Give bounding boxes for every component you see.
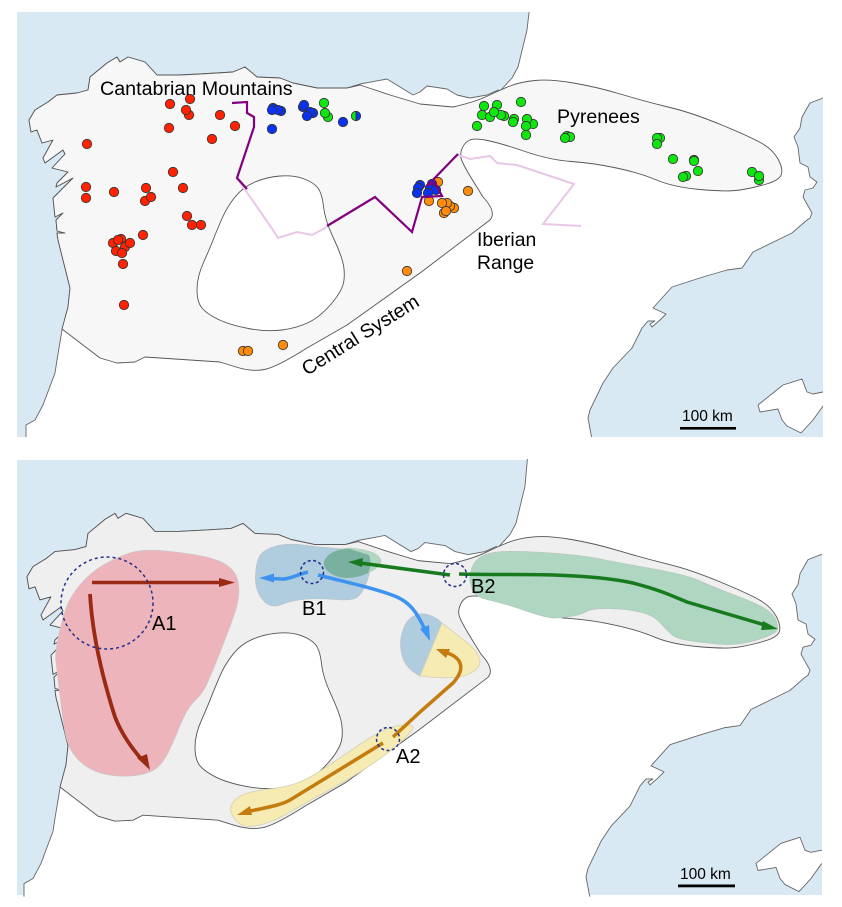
arrow: B1 south-east (318, 575, 430, 641)
label: A2: A2 (396, 746, 420, 768)
arrow: B1 westward (259, 572, 308, 582)
label: Pyrenees: Pyrenees (557, 106, 640, 128)
boundary line: purple parts (232, 102, 458, 232)
label: B2: B2 (471, 576, 495, 598)
arrow: B2 eastward (459, 574, 778, 630)
site marker: mixed green and blue (351, 111, 361, 121)
mountain range area (27, 513, 780, 829)
dashed circle: A1 (61, 557, 153, 649)
panel: top map of sampling sites (17, 4, 830, 445)
region: B2 green overlap (324, 548, 381, 578)
region: B2 green Pyrenees (470, 551, 778, 645)
boundary line: faded parts (237, 155, 581, 238)
site markers: red (81, 94, 240, 310)
dashed circle: A2 (376, 728, 400, 750)
region: A2 yellow Central System (230, 725, 413, 826)
label: Iberian Range: Iberian (477, 229, 536, 251)
label: Central System: Central System (298, 291, 423, 380)
arrow: A1 southward (90, 594, 150, 770)
arrow: A2 north to Iberian (393, 649, 461, 737)
scale bar: 100 km (680, 866, 731, 883)
region: B1 blue (255, 544, 370, 606)
land and coastline (26, 4, 830, 445)
label: Cantabrian Mountains: Cantabrian Mountains (100, 78, 293, 100)
site markers: orange (238, 177, 473, 356)
label: A1: A1 (152, 613, 176, 635)
mountain range area (29, 57, 782, 370)
arrow: B2 westward (348, 558, 450, 575)
region: A1 red (56, 550, 239, 776)
scale bar: 100 km (682, 408, 733, 425)
arrow: A1 eastward (92, 578, 235, 587)
site markers: green (319, 97, 764, 185)
arrow: A2 westward (237, 743, 383, 815)
land and coastline (24, 452, 828, 904)
dashed circle: B1 (300, 560, 324, 584)
region: A2 yellow Iberian (420, 623, 480, 678)
panel: bottom map of expansion routes (17, 452, 828, 904)
label: B1: B1 (302, 598, 326, 620)
site markers: blue (267, 100, 441, 198)
label: Iberian Range: Range (477, 252, 534, 274)
region: B1 blue Iberian (401, 614, 442, 676)
sea background (17, 12, 823, 437)
sea background (17, 460, 822, 895)
dashed circle: B2 (444, 564, 466, 586)
